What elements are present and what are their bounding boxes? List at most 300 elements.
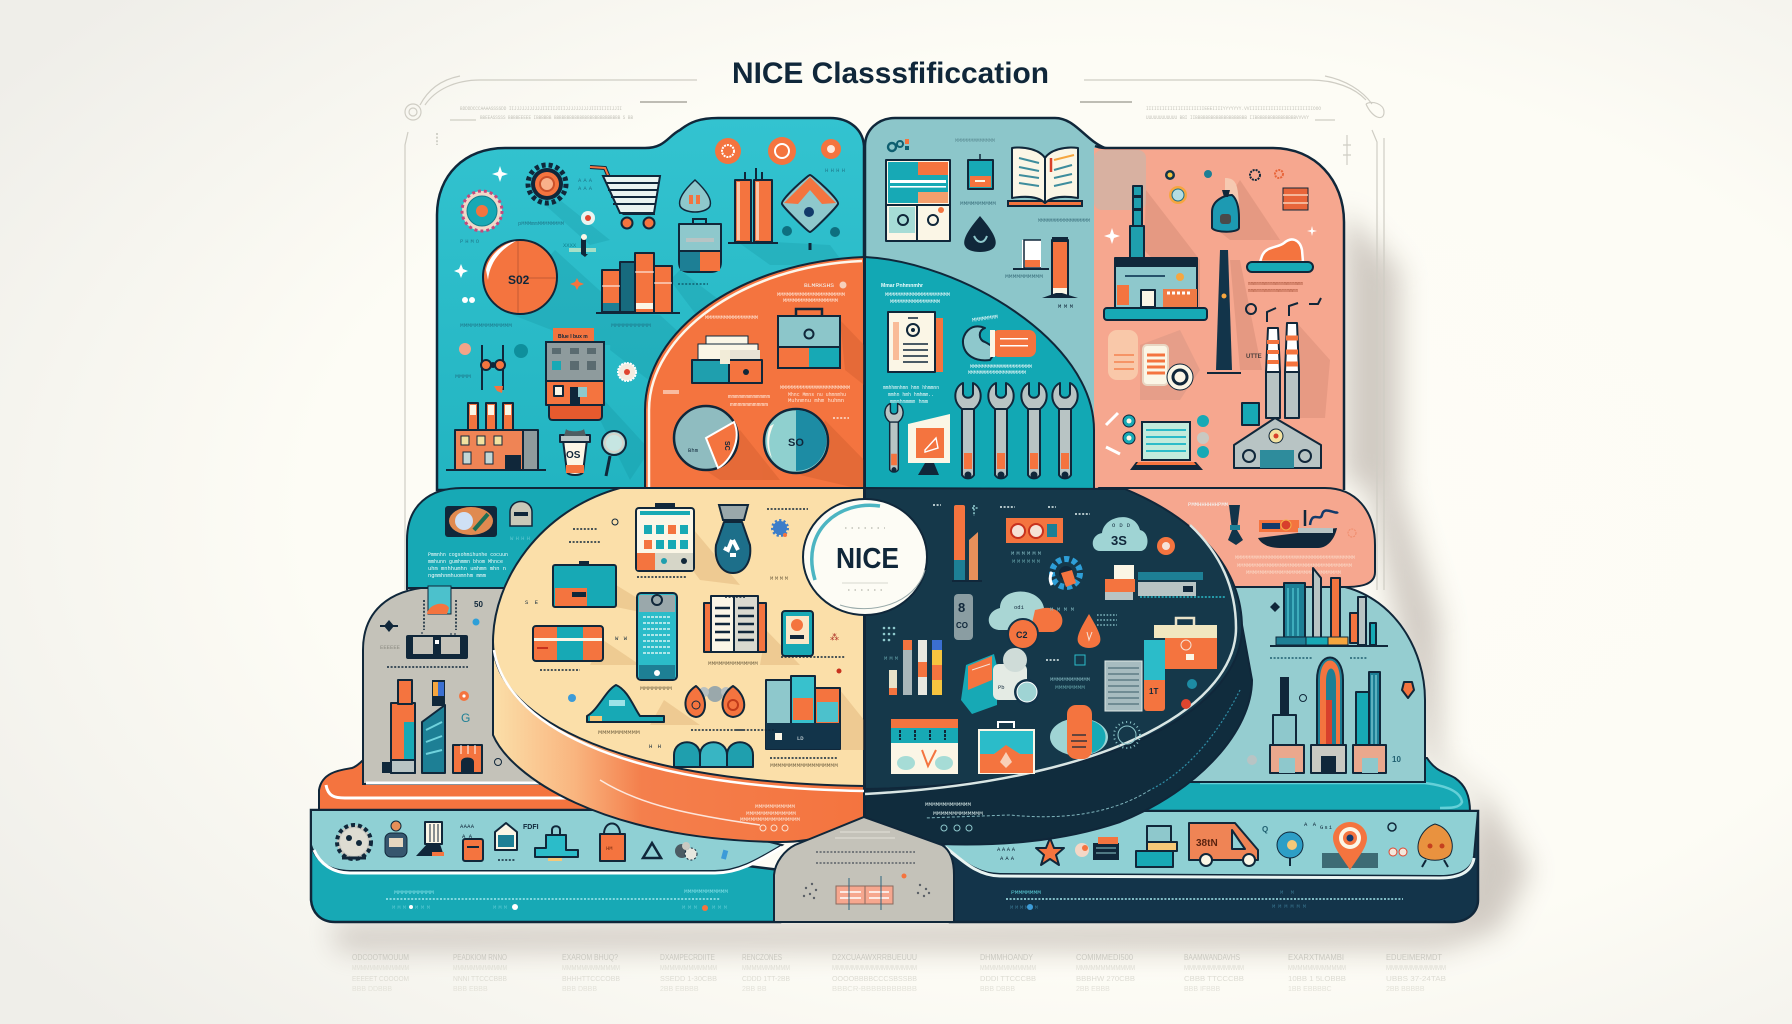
teal panel micro copy: MMMMMMMMMMMMMMMMMMMMM (885, 291, 950, 298)
icon: calendar (636, 503, 694, 571)
labels: micro copy on teal: AAA (578, 177, 593, 184)
diagonal shadows right (1144, 180, 1330, 418)
icon: triangle (643, 843, 661, 858)
bottom right micro copy: AA (1304, 821, 1317, 828)
bottom right micro copy: MMMMMM (1272, 903, 1306, 910)
legend column 6: OOOOBBBBCCCSBSSBB (832, 976, 917, 983)
mid-left micro copy (428, 535, 530, 579)
icon: striped box (1283, 188, 1308, 210)
dark disc micro marks: MMMMMMMM (1055, 684, 1085, 691)
bottom left micro copy: MMM (712, 904, 727, 911)
icon: orange badge panel (1006, 518, 1063, 543)
legend column 3: BHHHTTCCCOBB (562, 976, 620, 983)
labels: micro copy on light panel: UTTE (1246, 354, 1262, 360)
header ornament: left: BBEEASSSSS BBBBEEEEE IBBBBBB BBBBBBBBBBBBBBBBBBBBBBBBBB S BB (480, 114, 634, 121)
legend column 9: CBBB TTCCCBB (1184, 976, 1244, 983)
icon: binocular stand (459, 343, 528, 393)
icon: smoke curls (1246, 298, 1321, 322)
icon: cloud with orange token: odi (1014, 604, 1025, 611)
icon: lamp (1228, 505, 1243, 545)
bottom right micro copy: Gsi (1320, 824, 1333, 831)
orange panel micro copy: MMMMMMMMMMMMMMMMM (705, 314, 758, 321)
legend column 1: ODCOOTMOUUM (352, 953, 409, 962)
icon: stone cluster (675, 842, 697, 860)
icon: tablet device (968, 154, 993, 189)
icon: chain glyph (888, 139, 909, 151)
icon: chimney factory (1104, 186, 1207, 320)
NICE centre badge: NICE (836, 543, 899, 575)
icon: three binders (766, 676, 840, 749)
cream micro copy: MMMMMMMM (640, 685, 672, 692)
panel: top-right light teal and salmon (865, 118, 1344, 490)
teal panel micro copy: MMMMMMMMMMMMMMMMMMMM (968, 369, 1026, 376)
icon: cloud 3S (1093, 517, 1148, 551)
legend column 5: MMMMMMMMMM (742, 965, 790, 972)
legend column 10: MMMMMMMMMMMM (1288, 965, 1346, 972)
legend column 4: 2BB EBBBB (660, 986, 699, 993)
centre dotted rows (816, 852, 915, 863)
icons: small round tokens (1104, 170, 1317, 244)
teal panel micro copy: mmhhmnhmn hmn hhmmnn (883, 384, 939, 391)
icon: cloud 3S: ODD (1112, 522, 1131, 529)
legend column 1 (352, 953, 409, 993)
icon: star (1036, 838, 1064, 865)
labels: micro copy on light panel: mmmmmmmmmmmmmmmmmmmm (1248, 280, 1304, 287)
icon: small dots and glyphs: G (461, 711, 470, 725)
header ornament: right: UUUUUUUUUUUU BBI IIBBBBBBBBBBBBBBBBBBBB IIBBBBBBBBBBBBBBBBVVVVY (1146, 114, 1310, 121)
legend column 11: UBBS 37-24TAB (1386, 976, 1446, 983)
icon: pill capsule (1050, 705, 1108, 759)
orange panel micro copy: mmmmmmmmmm (730, 401, 769, 408)
icon: laptop (1130, 422, 1203, 470)
icon: person marker: XXXX (563, 242, 577, 249)
icon: orange spot (1157, 537, 1175, 555)
icon: sphere and ledger (1075, 837, 1119, 860)
orange panel micro copy: BLMRKSHS (804, 282, 835, 289)
cream micro copy: MMMMMMMMMMMMMMMMMM (770, 762, 838, 769)
icon: shopping cart (590, 167, 660, 228)
header ornament: right: IIIIIIIIIIIIIIIIIIIIIIEEEIIIIYYYYYYY.VVIIIIIIIIIIIIIIIIIIIIIIIIOOO (1146, 105, 1322, 112)
icon: arched furnace (1317, 658, 1343, 745)
icon: handheld and device cluster: Pb (998, 684, 1005, 691)
mid-left micro copy: WHHH (510, 535, 530, 542)
legend column 3: MMMMMMMMMMMM (562, 965, 620, 972)
icon: gear (528, 165, 566, 203)
icon: column lamp (416, 822, 444, 856)
icon: twin fruit (685, 686, 744, 717)
icon: three binders: LD (797, 735, 804, 742)
bottom right micro copy: MM (1280, 889, 1294, 896)
dark disc micro marks (883, 505, 1197, 831)
icon: card (553, 561, 616, 607)
icon: cup: OS (566, 450, 581, 461)
base plinth: teal right (1080, 758, 1470, 812)
base plinth: orange left (319, 758, 700, 812)
icons: laptop satellite circles (1106, 413, 1209, 458)
legend column 1: BBB DDBBB (352, 986, 392, 993)
legend column 10: 1BB EBBBBC (1288, 986, 1332, 993)
icon: open book (1008, 147, 1082, 206)
orange rim micro copy (740, 803, 800, 831)
icon: handheld and device cluster (961, 648, 1040, 714)
panel: orange quarter (645, 257, 864, 490)
diagonal icon shadows (500, 200, 845, 480)
icon: blue gear (1050, 559, 1080, 587)
legend column 6: BBBCR-BBBBBBBBBBB (832, 986, 917, 993)
icon: gear mascot (337, 825, 371, 859)
dark disc micro marks: MMMM (1050, 606, 1074, 613)
icon: monitor (908, 414, 950, 475)
teal panel micro copy: MMMMMMMMMMMMMMMM (890, 298, 940, 305)
icon: orange factory (446, 403, 546, 471)
icon: dome row (674, 742, 753, 767)
orange rim micro copy: MMMMMMMMMMMMMMMMM (740, 816, 800, 823)
bottom left micro copy: MMM (493, 904, 507, 911)
legend column 1: MMMMMMMMMMMMM (352, 965, 409, 972)
icon: hill machine (587, 685, 664, 722)
teal panel micro copy: mmhn hmh hmhmm.. (888, 391, 934, 398)
icon: sparkles (454, 166, 584, 303)
legend column 11: EDUEIMERMDT (1386, 953, 1442, 962)
icon: cloud with orange token (989, 592, 1062, 649)
icon: postcard (891, 719, 958, 774)
icon: vase with wrench (716, 505, 750, 573)
bottom right micro copy: Q (1262, 825, 1268, 834)
icon: robot (510, 502, 532, 526)
icon: wrench tag (963, 326, 1036, 360)
legend column 8: COMIMMEDI500 (1076, 953, 1134, 962)
orange panel micro copy: MMMMMMMMMMMMMMMMMMMMM (777, 291, 845, 298)
legend column 11: MMMMMMMMMMMM (1386, 965, 1446, 972)
mid-left micro copy: ngmmhnmhuomnhm mmm (428, 572, 487, 579)
bottom right micro copy: AAAA (997, 846, 1016, 853)
legend column 8 (1076, 953, 1135, 993)
labels: micro copy on teal: MMMM (455, 373, 471, 380)
cream micro copy: MMMMMMMMMMMMMM (708, 660, 758, 667)
icon: stacks and gatehouses (1270, 672, 1386, 773)
legend column 5: CDDD 1TT-2BB (742, 976, 790, 983)
mid-right micro copy (1188, 501, 1356, 576)
legend column 2: BBB EBBB (453, 986, 488, 993)
icon: wallet with cards (692, 328, 762, 383)
icon: beaker and orange bar (1013, 237, 1078, 298)
bottom right micro copy: MMMMMM (1010, 904, 1038, 911)
icon: tablet (782, 611, 813, 656)
bottom right micro copy: AAA (1000, 855, 1015, 862)
bottom left micro copy: MMM (392, 904, 406, 911)
labels: micro copy on teal: MMMMMMMMMM (611, 322, 651, 329)
panel: teal quarter (865, 257, 1094, 490)
icon: grid panel (886, 160, 950, 241)
icon: small markers (1247, 602, 1414, 765)
icon: blue skyscraper (422, 680, 445, 773)
legend column 8: 2BB EBBB (1076, 986, 1110, 993)
icon: ship (1258, 510, 1338, 548)
icons: three orange top badges (715, 137, 841, 165)
bottom left micro copy: MMM (415, 904, 430, 911)
bottom right micro copy: PMMMMMMM (1011, 889, 1041, 896)
orange panel micro copy: MMMMMMMMMMMMMMMMMMMMMMM (780, 384, 850, 391)
labels: micro copy on teal (455, 167, 845, 380)
icon: bicolour briefcase (1154, 618, 1217, 669)
teal panel micro copy (881, 283, 1032, 405)
icon: machine stack (1105, 565, 1226, 600)
panel: cream half disc with orange rim (493, 488, 864, 842)
cream micro copy: ⁂ (830, 632, 839, 642)
cream micro copy: MMMM (770, 575, 788, 582)
legend column 6: D2XCUAAWXRRBUEUUU (832, 953, 917, 962)
icon: location pin (1322, 822, 1378, 870)
icon: pillars (952, 505, 982, 582)
legend column 1: EEEEET COOOOM (352, 976, 409, 983)
icon: cup (560, 429, 590, 475)
mid-left micro copy: mmhunn gumhmmn bhom Mhnce (428, 558, 503, 565)
legend column 8: BBBHW 270CBB (1076, 976, 1135, 983)
mid-right micro copy: PMMHHHHHHPMM (1188, 501, 1228, 508)
icon shadows on cream (590, 530, 864, 750)
legend column 3 (562, 953, 620, 993)
bottom left micro copy: MMMMMMMMMM (394, 889, 434, 896)
icon: S02 disc (483, 240, 557, 314)
orange rim micro copy: MMMMMMMMMMM (755, 803, 795, 810)
legend column 10: 10BB 1 5LOBBB (1288, 976, 1346, 983)
icon: small target (618, 363, 636, 381)
chart: pie right: SO (788, 437, 804, 449)
bottom left micro copy (386, 823, 728, 911)
legend column 2 (453, 953, 507, 993)
teal panel micro copy: MMMMMMMM (972, 313, 998, 324)
icon: striped document and column: 1T (1149, 687, 1158, 696)
icons: stipple circles (803, 883, 930, 899)
icon: orange cylinders (728, 168, 778, 244)
icon: orange padlock bag: HM (606, 845, 613, 852)
labels: micro copy on teal: PHMO (460, 238, 480, 245)
orange panel micro copy (663, 282, 850, 418)
labels: micro copy on teal: pMMMmmMMMMMMMM (518, 220, 564, 227)
panel: bottom bar left (311, 810, 782, 922)
icon: cloud with orange token: C2 (1016, 630, 1028, 640)
bottom left micro copy: FDFI (523, 824, 539, 831)
labels: micro copy on light panel (955, 137, 1304, 360)
legend column 3: BBB DBBB (562, 986, 597, 993)
legend column 2: NNNI TTCCCBBB (453, 976, 507, 983)
icon: small white burst (581, 211, 595, 225)
labels: micro copy on light panel: MMMMMMMMMM (960, 200, 996, 207)
icon: dotted ring (462, 191, 502, 231)
bottom left micro copy: AA (462, 833, 473, 840)
icon: phone and ring cluster (1108, 330, 1200, 400)
legend column 4 (660, 953, 717, 993)
header ornament: right (1080, 76, 1384, 590)
legend column 7: MMMMMMMMMMMM (980, 965, 1036, 972)
cream micro copy: HH (649, 743, 661, 750)
panel: light teal side panel right (1180, 587, 1425, 782)
panel: grey side panel left (363, 587, 570, 784)
labels: micro copy on light panel: MMMMMMMMMMMMM (955, 137, 995, 144)
icon: diamond sign (782, 175, 840, 250)
icon: orange fruit mascot (1418, 824, 1452, 867)
chart: pie right (764, 409, 828, 473)
dark disc micro marks: MMMMMM (1012, 558, 1040, 565)
teal panel micro copy: mmmhmmmm hmm (890, 398, 929, 405)
icon: skyline rising over the band (1270, 568, 1388, 647)
labels: micro copy on light panel: MMMMMMMMMM (1005, 273, 1043, 280)
icon: small eyes (1388, 823, 1407, 856)
mid-left micro copy: uhm mnhhumhn umhmm mhn n (428, 565, 506, 572)
icon: delivery truck (1189, 823, 1258, 866)
icon: teal machine (535, 826, 578, 861)
icon: badge figure (385, 821, 407, 857)
legend column 9: BBB IFBBB (1184, 986, 1221, 993)
icon: blue bottle (1212, 178, 1240, 232)
legend column 7: DDDI TTCCCBB (980, 976, 1036, 983)
icon: S02 disc: S02 (508, 273, 530, 287)
icon: tall dark tower (1207, 250, 1241, 374)
labels: micro copy on teal: MMMMMMMMMMMMMM (460, 322, 512, 329)
panel: mid-right salmon band (1100, 488, 1375, 587)
orange panel micro copy: mmmmmmmmmmmm (728, 393, 771, 400)
panel: bottom bar right (942, 811, 1478, 922)
icon: small capsule 8 (954, 594, 973, 640)
icon: orange drop (1078, 614, 1100, 648)
legend column 6: MMMMMMMMMMMMMMMMM (832, 965, 917, 972)
icon: orange tower (382, 680, 415, 773)
header ornament: left: BDDDDCCCAAAASSSSDD IIJJJJJJJJJJJIIIIIJIIIJJJJJJJJJJIIIIIIIIJJII (460, 105, 622, 112)
chart: pie left (674, 406, 738, 470)
icon: cloud on tray (1247, 239, 1313, 272)
legend column 4: SSEDD 1-30CBB (660, 976, 717, 983)
icon: small markers: 10 (1392, 755, 1401, 764)
icon: dotted emblem (1114, 722, 1140, 748)
icon: compass globe (1277, 832, 1303, 866)
icon: teal orange bag (978, 722, 1035, 774)
labels: micro copy on teal: AAA (578, 185, 593, 192)
bottom right micro copy (997, 821, 1403, 911)
icon: small capsule 8: CO (956, 621, 968, 630)
mid-right micro copy: MMMMMMMMMMMMMMMMMMMMMMMMMMMM (1246, 569, 1341, 576)
icon: phone (637, 593, 677, 680)
icon: teal box with orange badge (427, 586, 451, 614)
legend column 8: MMMMMMMMMMMM (1076, 965, 1135, 972)
dark disc micro marks: MMMMMMMMMMMMM (925, 801, 971, 808)
NICE centre badge (803, 499, 927, 615)
footer legend columns (352, 953, 1446, 993)
icon: report page (888, 312, 943, 372)
icon: delivery truck: 38tN (1196, 838, 1218, 849)
labels: micro copy on light panel: MMM (1058, 303, 1073, 310)
soft drop shadows (330, 210, 1530, 950)
panel: mid-left teal band (407, 488, 660, 590)
icon: person marker (563, 234, 596, 257)
teal panel micro copy: MMMMMMMMMMMMMMMMMMMMM (970, 363, 1032, 370)
icon: orange gate (453, 745, 482, 773)
cream micro copy (525, 509, 845, 769)
icon: suitcase (679, 219, 721, 272)
labels: micro copy on teal: Blue I bux m (558, 334, 588, 340)
icon: orange box (463, 839, 483, 861)
legend column 7 (980, 953, 1036, 993)
orange panel micro copy: Mhnc Mmns nu uhmnmhu (788, 391, 846, 398)
labels: micro copy on light panel: mmmmmmmmmmmmmmmmmm (1248, 287, 1299, 294)
icons: row of wrenches (885, 383, 1078, 478)
legend column 9 (1184, 953, 1244, 993)
header ornament: left (405, 76, 697, 590)
dark disc micro marks: MMMMMM (1011, 550, 1041, 557)
legend column 5 (742, 953, 790, 993)
icon: dark drop (964, 216, 996, 252)
icon: small dots and glyphs: EEEEEE (380, 644, 401, 651)
chart: pie left: Bhm (688, 447, 699, 454)
chart: pie left: SC (723, 441, 730, 451)
legend column 2: MMMMMMMMMMMM (453, 965, 507, 972)
legend column 4: DXAMPECRDIITE (660, 953, 715, 962)
icon: orange padlock bag (600, 824, 625, 861)
orange panel micro copy: Muhnmnu mhm huhmn (788, 397, 844, 404)
mid-left micro copy: Pmmnhn cogsohmihunhe cocuun (428, 551, 508, 558)
icon: magnifier (602, 431, 626, 476)
panel: centre grey keystone (774, 817, 954, 922)
cream micro copy: SE (525, 599, 539, 606)
legend column 9: MMMMMMMMMMMM (1184, 965, 1244, 972)
legend column 7: BBB DBBB (980, 986, 1015, 993)
icon: ledger book (704, 596, 766, 652)
teal panel micro copy: Mmar Pnhmnmhr (881, 283, 923, 289)
orange rim micro copy: MMMMMMMMMMMMMM (746, 810, 796, 817)
icon: cloud 3S: 3S (1111, 533, 1127, 548)
bottom left micro copy: MMMMMMMMMMMM (684, 888, 728, 895)
panel: top-left teal (437, 118, 864, 490)
legend column 7: DHMMHOANDY (980, 953, 1034, 962)
icon: parcel stack (1136, 826, 1177, 867)
icon: machine building (546, 328, 604, 420)
icon: thumbnail (445, 506, 497, 537)
orange panel micro copy: MMMMMMMMMMMMMMMMM (783, 297, 838, 304)
icon: briefcase (778, 309, 840, 368)
icon: striped smokestack factory (1234, 323, 1321, 468)
icon: drop badge (680, 180, 710, 212)
bottom left micro copy: MMM (682, 904, 697, 911)
dark disc micro marks: MMMMMMMMMMMMM (933, 810, 983, 817)
icon: small dots and glyphs (380, 600, 502, 766)
icon: pipes (406, 630, 468, 659)
icon: striped document and column (1105, 640, 1165, 711)
legend column 10: EXARXTMAMBI (1288, 953, 1344, 962)
legend column 2: PEADKIOM RNNO (453, 953, 507, 962)
icon: striped orange coupons (836, 874, 906, 910)
icon: binders (596, 253, 680, 314)
legend column 5: 2BB BB (742, 986, 767, 993)
dark disc micro marks: MMM (884, 655, 898, 662)
mid-right micro copy: MMMMMMMMMMMMMMMMMMMMMMMMMMMMMMMMMMMMMMM (1235, 554, 1355, 561)
title: NICE Classsfificcation (732, 57, 1049, 90)
icon: small dots and glyphs: 50 (474, 600, 483, 609)
legend column 3: EXAROM BHUQ? (562, 953, 618, 962)
labels: micro copy on teal: HHHH (825, 167, 845, 174)
legend column 11: 2BB BBBBB (1386, 986, 1425, 993)
cream micro copy: WW (615, 635, 628, 642)
legend column 6 (832, 953, 917, 993)
cream micro copy: MMMMMMMMMM (598, 729, 640, 736)
legend column 5: RENCZONES (742, 953, 782, 962)
mid-right micro copy: MMMMMMMMMMMMMMMMMMMMMMMMMMMMMMMMMMM (1237, 562, 1352, 569)
legend column 11 (1386, 953, 1446, 993)
icon: small gear (773, 521, 787, 537)
dark disc micro marks: MMMMMMMMMMMM (1050, 676, 1090, 683)
panel: dark half disc with rim (865, 488, 1252, 844)
icon: small capsule 8: 8 (958, 600, 965, 615)
chart: vertical tubes (889, 640, 942, 695)
labels: micro copy on light panel: MMMMMMMMMMMMMMMMMM (1038, 217, 1090, 224)
